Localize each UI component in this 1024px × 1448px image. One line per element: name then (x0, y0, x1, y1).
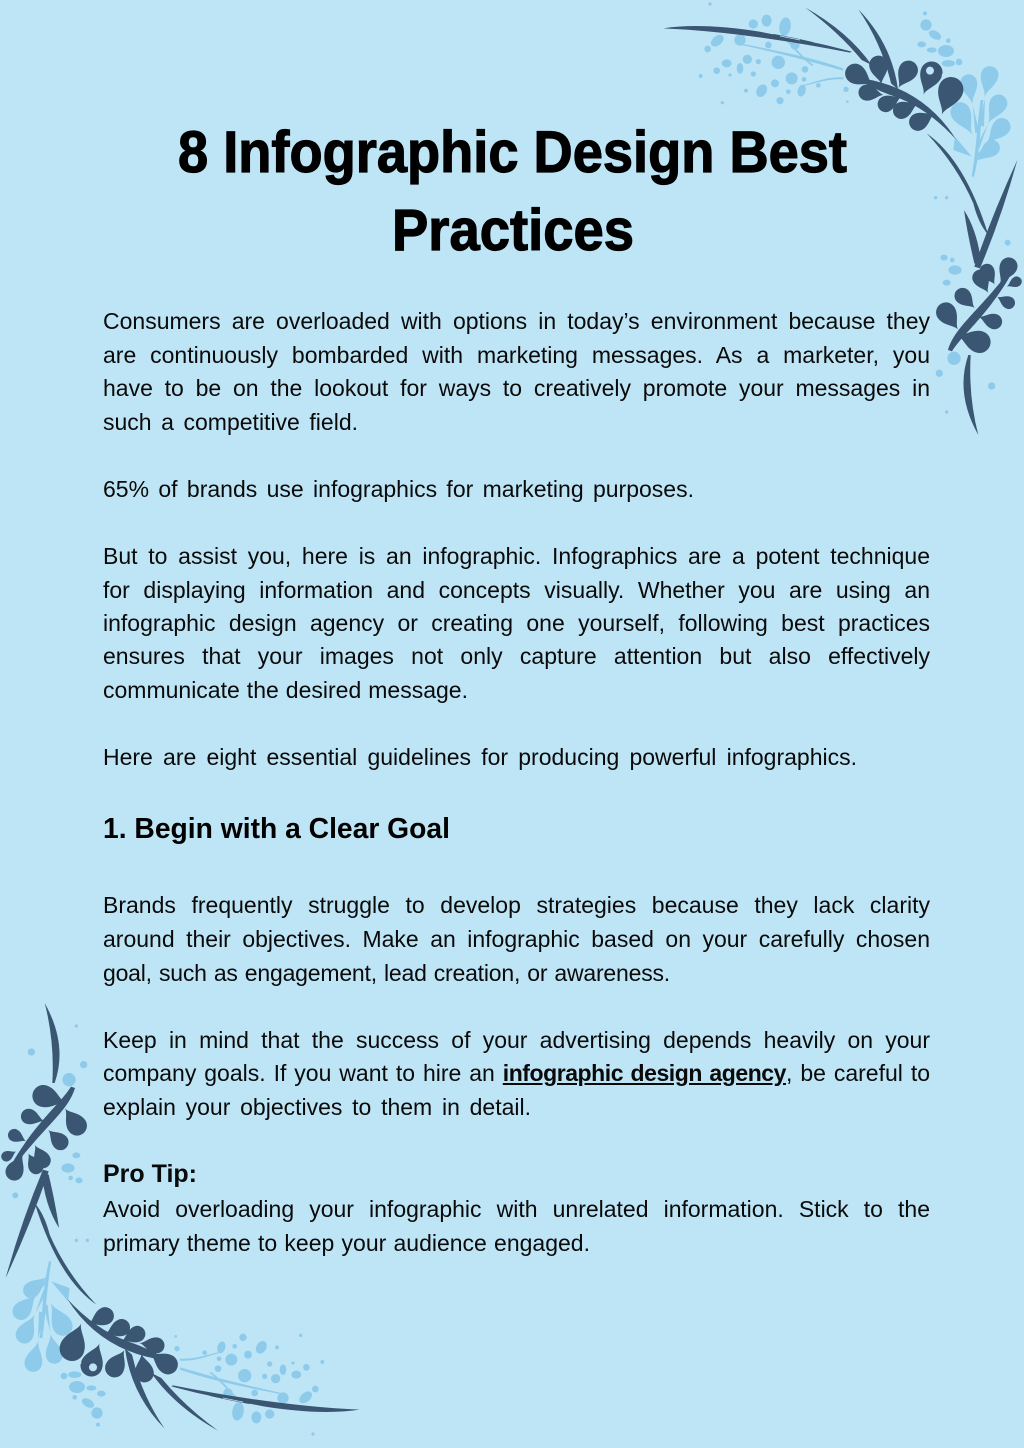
intro paragraph (103, 308, 930, 435)
paragraph: what infographics do: communicate the desired message. (103, 677, 468, 703)
pro tip callout: Avoid overloading your infographic with unrelated information. Stick to the (103, 1196, 930, 1222)
intro paragraph: have to be on the lookout for ways to creatively promote your messages in (103, 375, 930, 401)
paragraph: clarity of objectives: goal, such as engagement, lead creation, or awareness. (103, 960, 670, 986)
paragraph: what infographics do: for displaying information and concepts visually. Whether you are using an (103, 577, 930, 603)
heading: 1. Begin with a Clear Goal: 1. Begin with a Clear Goal (103, 813, 450, 845)
intro paragraph: such a competitive field. (103, 409, 358, 435)
intro paragraph: Consumers are overloaded with options in today’s environment because they (103, 308, 930, 334)
pro tip label: Pro Tip: (103, 1160, 197, 1188)
paragraph: what infographics do: But to assist you, here is an infographic. Infographics are a potent technique (103, 543, 930, 569)
lead-in sentence: Here are eight essential guidelines for producing powerful infographics. (103, 744, 857, 770)
paragraph: company goals with link (103, 1027, 930, 1120)
paragraph: what infographics do (103, 543, 930, 703)
title: 8 Infographic Design Best (178, 120, 847, 185)
paragraph: what infographics do: infographic design agency or creating one yourself, following best practices (103, 610, 930, 636)
paragraph: clarity of objectives: around their objectives. Make an infographic based on your carefully chosen (103, 926, 930, 952)
paragraph: company goals with link: Keep in mind that the success of your advertising depends heavily on your (103, 1027, 930, 1053)
paragraph: what infographics do: ensures that your images not only capture attention but also effectively (103, 643, 930, 669)
title: Practices (392, 198, 634, 263)
paragraph: clarity of objectives: Brands frequently struggle to develop strategies because they lack clarity (103, 892, 930, 918)
pro tip callout (103, 1160, 930, 1256)
paragraph: clarity of objectives (103, 892, 930, 986)
paragraph: company goals with link: company goals. If you want to hire an infographic design agency, be careful to (103, 1060, 930, 1086)
intro paragraph: are continuously bombarded with marketing messages. As a marketer, you (103, 342, 930, 368)
statistic: 65% of brands: 65% of brands use infographics for marketing purposes. (103, 476, 694, 502)
pro tip callout: primary theme to keep your audience engaged. (103, 1230, 590, 1256)
title (178, 120, 847, 263)
paragraph: company goals with link: explain your objectives to them in detail. (103, 1094, 531, 1120)
